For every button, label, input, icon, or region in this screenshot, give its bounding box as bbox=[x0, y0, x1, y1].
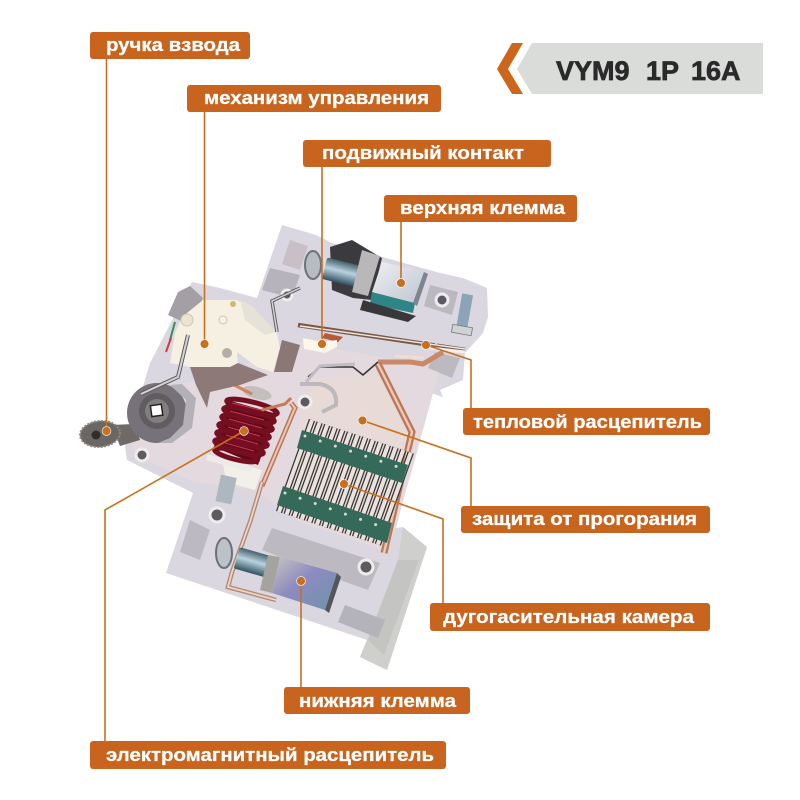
label: burn-through protection bbox=[358, 416, 710, 533]
breaker cutaway illustration bbox=[79, 225, 488, 670]
upper plate bbox=[297, 430, 408, 483]
bottom terminal bbox=[216, 538, 341, 613]
badge text: 1P bbox=[646, 56, 679, 86]
label: thermal release bbox=[422, 341, 710, 435]
badge text: VYM9 bbox=[556, 56, 630, 86]
din clip bbox=[360, 527, 427, 670]
label: electromagnetic release bbox=[90, 427, 446, 769]
trip coil bbox=[206, 383, 278, 504]
right bolt bbox=[451, 293, 473, 336]
label: moving contact bbox=[303, 140, 551, 348]
label: burn-through protection: защита от прогорания bbox=[472, 509, 697, 529]
label: upper terminal bbox=[384, 195, 577, 287]
label: lower terminal bbox=[284, 577, 470, 714]
arc shield wire bbox=[300, 362, 378, 412]
cocking handle bbox=[79, 383, 196, 449]
label: thermal release: тепловой расцепитель bbox=[473, 412, 702, 432]
coil copper leads bbox=[230, 383, 295, 486]
label: control mechanism: механизм управления bbox=[204, 88, 429, 108]
copper conductor bbox=[378, 364, 412, 553]
lower plate bbox=[277, 486, 392, 543]
label: cocking handle bbox=[90, 32, 250, 435]
moving contact bbox=[298, 325, 465, 353]
label: electromagnetic release: электромагнитный расцепитель bbox=[106, 745, 434, 765]
thermal release bbox=[378, 323, 465, 364]
lower copper strap bbox=[228, 482, 276, 600]
label: cocking handle: ручка взвода bbox=[106, 35, 241, 55]
label: control mechanism bbox=[187, 85, 441, 348]
breaker housing bbox=[125, 225, 488, 670]
label: lower terminal: нижняя клемма bbox=[299, 691, 457, 711]
mounting holes bbox=[136, 290, 448, 574]
badge text: 16A bbox=[691, 56, 741, 86]
top terminal bbox=[305, 240, 428, 322]
arc chute bbox=[277, 420, 411, 544]
housing recesses bbox=[180, 240, 460, 638]
inner chamber floor bbox=[130, 342, 440, 552]
trip mechanism bbox=[166, 286, 300, 408]
label: arc chute: дугогасительная камера bbox=[443, 607, 695, 627]
label: moving contact: подвижный контакт bbox=[322, 143, 524, 163]
model badge bbox=[497, 43, 763, 94]
label: upper terminal: верхняя клемма bbox=[400, 198, 566, 218]
badge chevron bbox=[497, 43, 523, 94]
badge plate bbox=[517, 43, 763, 94]
label: arc chute bbox=[340, 480, 710, 631]
springs bbox=[141, 288, 300, 394]
